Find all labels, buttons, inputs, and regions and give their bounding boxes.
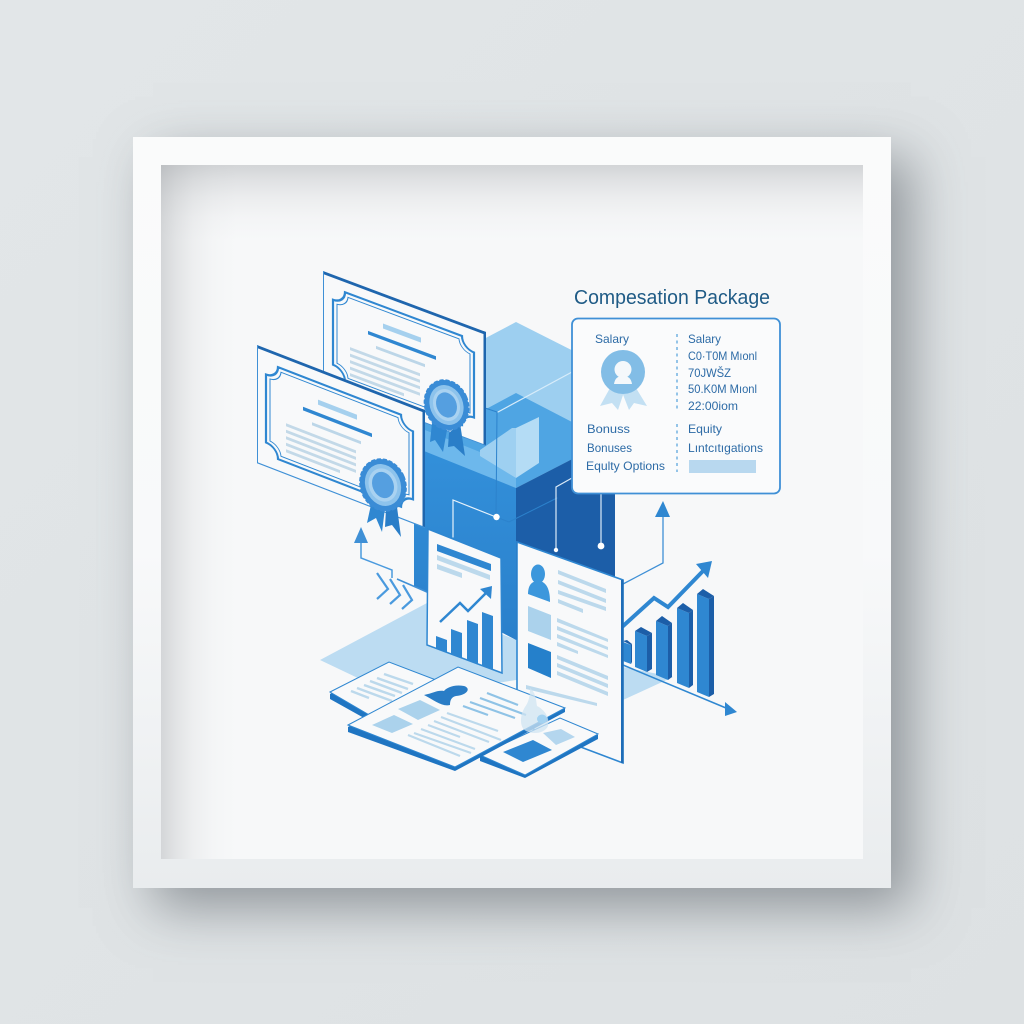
left salary label: Salary bbox=[595, 332, 629, 346]
front certificate seal bbox=[352, 452, 414, 537]
rear certificate bbox=[323, 271, 486, 456]
chevrons bbox=[377, 573, 412, 609]
compensation card: 70JWŠZ bbox=[688, 365, 731, 380]
cube top bbox=[425, 322, 615, 488]
cube inner tier bbox=[425, 393, 615, 488]
chart document bbox=[427, 529, 502, 673]
card title: Compesation Package bbox=[574, 287, 770, 309]
main paper blocks bbox=[398, 700, 440, 720]
picture frame bbox=[133, 137, 891, 888]
chart axis bbox=[623, 665, 726, 708]
compensation card: Bonuses bbox=[587, 441, 632, 455]
profile avatar bbox=[528, 564, 550, 602]
back left paper bbox=[330, 662, 470, 738]
front certificate bbox=[257, 345, 425, 537]
compensation card: 22:00iom bbox=[688, 399, 738, 413]
right bar chart bbox=[622, 561, 737, 716]
profile document bbox=[517, 542, 624, 763]
document trend arrow bbox=[440, 591, 488, 622]
card body bbox=[572, 318, 780, 494]
flat papers on floor bbox=[330, 662, 598, 778]
document header lines bbox=[437, 544, 491, 571]
right values: Salary bbox=[688, 332, 721, 346]
compensation card: Equlty Options bbox=[586, 459, 665, 473]
connector nodes bbox=[493, 514, 500, 520]
right paper bbox=[480, 720, 598, 778]
central cube bbox=[414, 322, 615, 640]
compensation card: C0·T0M Mıonl bbox=[688, 349, 757, 363]
dotted dividers bbox=[676, 334, 678, 411]
floor shadow bbox=[320, 603, 673, 700]
left up arrow with chevrons bbox=[354, 527, 427, 609]
profile text lines bbox=[526, 570, 608, 706]
profile image blocks bbox=[528, 606, 551, 640]
cube left face bbox=[414, 447, 516, 640]
bars bbox=[623, 642, 631, 664]
compensation card: Equity bbox=[688, 422, 722, 436]
inner box bbox=[480, 417, 539, 478]
right connector arrow bbox=[623, 501, 670, 584]
main paper bbox=[348, 667, 565, 771]
main paper avatar bbox=[424, 685, 468, 705]
left labels: Bonuss bbox=[587, 422, 630, 436]
cube right face bbox=[516, 437, 615, 640]
trend arrow bbox=[622, 571, 703, 627]
back left paper lines bbox=[351, 674, 413, 701]
compensation card: Lıntcıtıgations bbox=[688, 441, 763, 455]
icon: medal with person bbox=[600, 350, 647, 410]
equity bar bbox=[689, 460, 756, 473]
translucent droplet bbox=[521, 688, 548, 733]
compensation card: 50.K0M Mıonl bbox=[688, 382, 757, 396]
main paper lines bbox=[408, 693, 526, 756]
connector lines bbox=[453, 372, 601, 548]
rear certificate seal bbox=[417, 373, 476, 456]
compensation card bbox=[572, 287, 780, 494]
document bars bbox=[436, 636, 447, 652]
cube band bbox=[425, 430, 516, 488]
